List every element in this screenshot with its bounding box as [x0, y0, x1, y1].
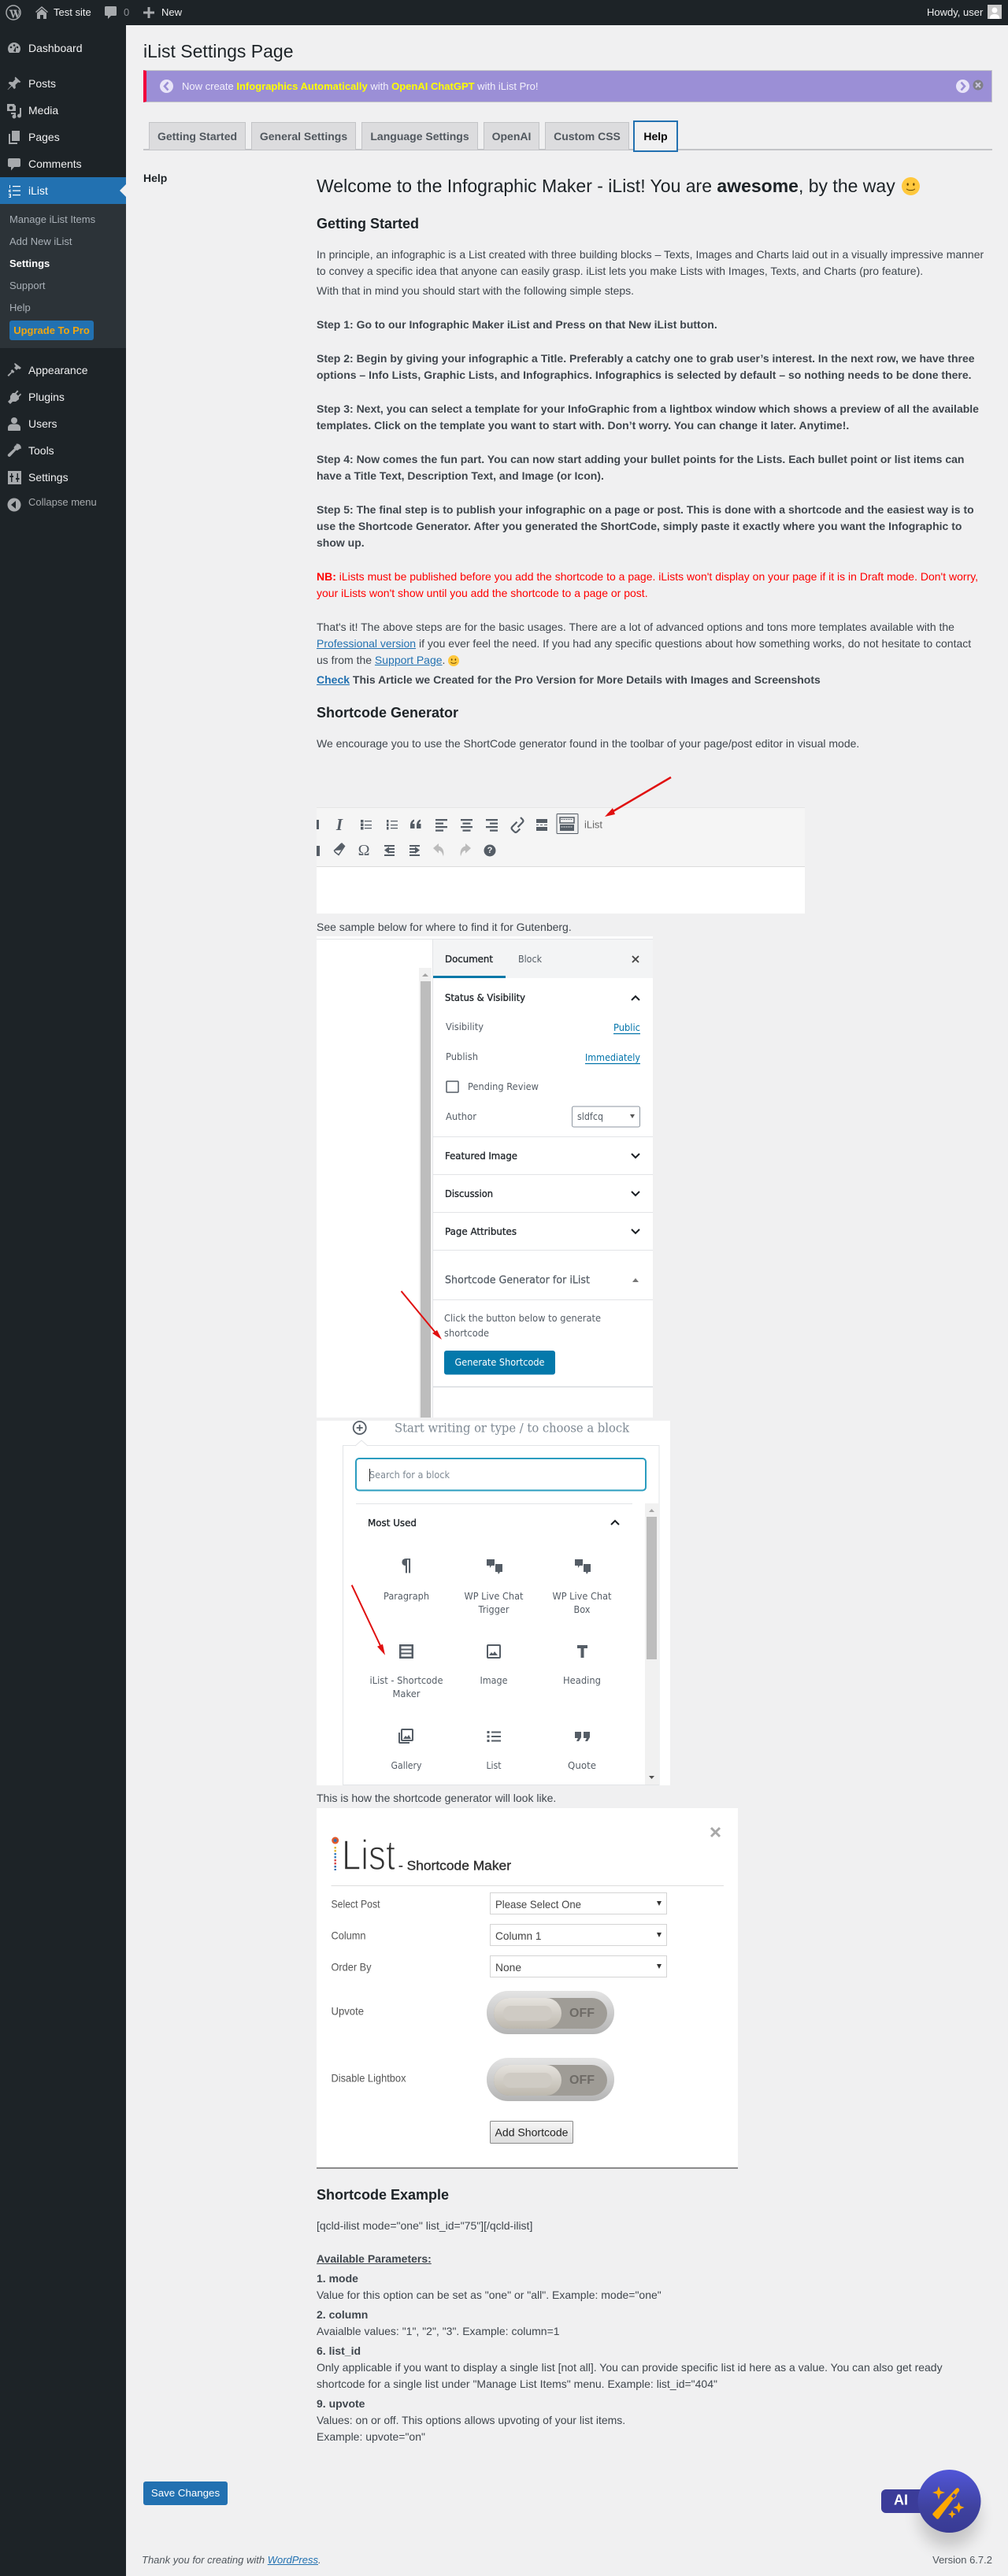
step 5: Step 5: The final step is to publish your infographic on a page or post. This is done with a shortcode and the easiest way is to: [317, 503, 974, 516]
row: order by: [331, 1956, 666, 1977]
warning note: [317, 570, 978, 599]
closing paragraph: That's it! The above steps are for the basic usages. There are a lot of advanced options and tons more templates available with the: [317, 621, 954, 633]
editor area: [317, 867, 805, 914]
parameter: list_id: Only applicable if you want to display a single list [not all]. You can provide specific list id here as a value. You can also get ready: [317, 2361, 943, 2374]
screenshot: block inserter: [317, 1421, 670, 1785]
iList toolbar label: iList: [584, 819, 602, 830]
icon: comments: [105, 6, 117, 19]
save changes button: [143, 2481, 228, 2505]
submenu link: Manage iList Items: Manage iList Items: [9, 213, 95, 225]
icon: WordPress logo: [6, 5, 21, 20]
menu item: Posts: Posts: [28, 77, 56, 90]
step 3: templates. Click on the template you want to start with. Don’t worry. You can change it later. Anytime!.: [317, 419, 849, 432]
menu item: Settings: Settings: [28, 471, 69, 484]
step 3: [317, 402, 979, 432]
parameter: mode: 1. mode: [317, 2272, 358, 2285]
greeting: Howdy, user: [927, 6, 983, 18]
panel: shortcode generator for iList: [433, 1274, 653, 1388]
intro paragraph: [317, 248, 984, 277]
row: column: Column: [331, 1929, 365, 1942]
screenshot background: [317, 1421, 670, 1785]
panel: status and visibility: [433, 992, 653, 1137]
arrow pointing at iList block: [352, 1585, 385, 1655]
inserter scrollbar: [645, 1503, 659, 1785]
screenshot: classic editor toolbar: ?: [487, 846, 493, 855]
parameter: upvote: [317, 2397, 625, 2443]
block: Heading: Heading: [563, 1675, 601, 1686]
icon: plus: [143, 7, 154, 18]
row: upvote toggle: Upvote: [331, 2005, 364, 2018]
menu item: Users: Users: [28, 417, 57, 430]
shortcode sample: [qcld-ilist mode="one" list_id="75"][/qcld-ilist]: [317, 2219, 532, 2232]
toolbar background: [317, 807, 805, 866]
inserter panel: [343, 1440, 659, 1785]
submenu link: Settings: Settings: [9, 258, 50, 269]
sidebar tabs: Block: [518, 954, 542, 965]
panel: status and visibility: Author: [446, 1111, 476, 1122]
closing paragraph: us from the Support Page.: [317, 654, 445, 666]
step 3: Step 3: Next, you can select a template for your InfoGraphic from a lightbox window which shows a preview of all the available: [317, 402, 979, 415]
step 5: show up.: [317, 536, 365, 549]
submenu button: Upgrade To Pro: [9, 321, 94, 340]
row: upvote toggle: OFF: [569, 2007, 595, 2020]
step 2: Step 2: Begin by giving your infographic a Title. Preferably a catchy one to grab user’s interest. In the next row, we have three: [317, 352, 975, 365]
block: Gallery: [391, 1729, 422, 1771]
caption: Gutenberg: See sample below for where to find it for Gutenberg.: [317, 921, 572, 933]
footer version: Version 6.7.2: [932, 2554, 992, 2566]
parameter: mode: Value for this option can be set as "one" or "all". Example: mode="one": [317, 2289, 662, 2301]
toolbar row two icons: [317, 842, 496, 859]
row: disable lightbox toggle: Disable Lightbox: [331, 2071, 406, 2084]
heading: Shortcode Generator: Shortcode Generator: [317, 705, 458, 721]
parameter: column: Avaialble values: "1", "2", "3". Example: column=1: [317, 2325, 560, 2337]
menu item: Comments: Comments: [28, 158, 82, 170]
block: WP Live Chat Box: WP Live Chat: [553, 1591, 612, 1602]
row: order by: Order By: [331, 1961, 372, 1974]
tab strip line: [143, 149, 992, 150]
row: column: [331, 1925, 666, 1945]
block: WP Live Chat Trigger: [465, 1559, 524, 1615]
block: Paragraph: ¶: [401, 1556, 412, 1577]
sidebar tabs: Document: [445, 954, 493, 965]
toolbar row one icons: I: [335, 815, 343, 834]
panel: status and visibility: Immediately: [585, 1052, 640, 1063]
tab: Language Settings: [361, 122, 478, 150]
save changes button: Save Changes: [151, 2487, 220, 2499]
menu item: Posts: [8, 77, 56, 90]
block: Image: Image: [480, 1675, 507, 1686]
toolbar row one icons: [317, 814, 578, 834]
panel: status and visibility: Pending Review: [468, 1081, 539, 1092]
icon: next arrow: [956, 80, 969, 93]
menu item: Settings: [8, 471, 69, 484]
closing paragraph: Professional version if you ever feel the need. If you had any specific questions about how something works, do not hesitate to contact: [317, 637, 971, 650]
step 2: options – Info Lists, Graphic Lists, and Infographics. Infographics is selected by default – so nothing needs to be done there.: [317, 369, 972, 381]
panel: collapsed sections: [433, 1151, 653, 1251]
block: Image: [480, 1645, 507, 1686]
icon: close: [973, 80, 983, 90]
intro sentence: With that in mind you should start with the following simple steps.: [317, 284, 634, 297]
notice text: Now create Infographics Automatically with OpenAI ChatGPT with iList Pro!: [182, 80, 538, 92]
welcome heading: Welcome to the Infographic Maker - iList! You are awesome, by the way: [317, 176, 895, 196]
menu item: Appearance: [8, 363, 88, 376]
AI assistant floating button: [881, 2470, 984, 2553]
step 4: have a Title Text, Description Text, and Image (or Icon).: [317, 469, 604, 482]
parameter: mode: [317, 2272, 662, 2301]
row: upvote toggle: [331, 1991, 614, 2034]
block: Paragraph: Paragraph: [384, 1591, 429, 1602]
step 5: [317, 503, 974, 549]
row: select post: Please Select One: [495, 1898, 581, 1911]
shadow: [919, 2487, 979, 2547]
menu item: Media: Media: [28, 104, 58, 117]
block: Paragraph: [384, 1556, 429, 1602]
block: List: List: [487, 1760, 502, 1771]
arrow pointing at generate text: [402, 1292, 442, 1340]
warning note: NB: iLists must be published before you add the shortcode to a page. iLists won't display on your page if it is in Draft mode. Don't worry,: [317, 570, 978, 583]
menu item: Appearance: Appearance: [28, 364, 88, 376]
parameters heading: Available Parameters:: [317, 2252, 432, 2265]
icon: previous arrow: [160, 80, 173, 93]
collapse menu: Collapse menu: [28, 496, 97, 508]
menu item: Plugins: [8, 391, 65, 404]
panel: status and visibility: Visibility: [446, 1021, 484, 1032]
iList submenu: [0, 204, 126, 348]
add block icon: [354, 1421, 366, 1434]
row: select post: Select Post: [331, 1898, 380, 1911]
tab: OpenAI: OpenAI: [492, 130, 531, 143]
avatar: [988, 5, 1002, 19]
screenshot background: [317, 936, 653, 1418]
panel: collapsed sections: Discussion: [445, 1188, 493, 1199]
icon: home: [35, 6, 48, 19]
sidebar tabs: [433, 940, 653, 978]
menu item: Users: [8, 417, 57, 431]
tab: Help (active): [633, 120, 678, 152]
panel: collapsed sections: Page Attributes: [445, 1226, 517, 1237]
toolbar row two icons: Ω: [358, 842, 369, 859]
tab: General Settings: [251, 122, 356, 150]
tab: OpenAI: [484, 122, 539, 150]
step 1: Step 1: Go to our Infographic Maker iList and Press on that New iList button.: [317, 318, 717, 331]
block: iList Shortcode Maker: iList - Shortcode: [370, 1675, 443, 1686]
parameter: list_id: 6. list_id: [317, 2344, 361, 2357]
placeholder heading: Start writing or type / to choose a block: [395, 1421, 629, 1435]
submenu link: Support: Support: [9, 280, 46, 291]
screenshot: classic editor toolbar: [317, 777, 805, 914]
inserter panel: Most Used: [368, 1518, 417, 1529]
new link: New: [161, 6, 182, 18]
page title: iList Settings Page: [143, 41, 294, 61]
footer credit: Thank you for creating with WordPress.: [142, 2554, 321, 2566]
warning note: your iLists won't show until you add the shortcode to a page or post.: [317, 587, 648, 599]
inserter panel: Search for a block: [369, 1470, 450, 1481]
logo: [332, 1832, 511, 1879]
panel: shortcode generator for iList: Click the button below to generate: [444, 1313, 601, 1324]
submenu link: Add New iList: Add New iList: [9, 235, 72, 247]
row: select post: [331, 1893, 666, 1914]
block: WP Live Chat Trigger: WP Live Chat: [465, 1591, 524, 1602]
heading: Getting Started: Getting Started: [317, 216, 419, 232]
menu item: Pages: [9, 131, 60, 144]
parameter: upvote: Values: on or off. This options allows upvoting of your list items.: [317, 2414, 625, 2426]
block: List: [487, 1731, 502, 1771]
heading: Shortcode Example: Shortcode Example: [317, 2187, 449, 2203]
intro paragraph: to convey a specific idea that anyone can easily grasp. iList lets you make Lists with Images, Texts, and Charts (pro feature).: [317, 265, 923, 277]
section label: Help: Help: [143, 172, 167, 184]
icon: smiley: [902, 177, 920, 195]
block: WP Live Chat Box: [553, 1559, 612, 1615]
row: disable lightbox toggle: OFF: [569, 2074, 595, 2087]
menu item: Dashboard: Dashboard: [28, 42, 82, 54]
step 4: [317, 453, 964, 482]
active menu pointer: [120, 184, 126, 197]
panel: shortcode generator for iList: Generate Shortcode: [455, 1357, 545, 1368]
logo: - Shortcode Maker: [398, 1859, 511, 1873]
block: WP Live Chat Trigger: Trigger: [478, 1604, 510, 1615]
icon: magic wand: [932, 2486, 964, 2519]
panel: collapsed sections: Featured Image: [445, 1151, 517, 1162]
step 2: [317, 352, 975, 381]
AI label pill: AI: [894, 2492, 908, 2507]
block: iList Shortcode Maker: Maker: [392, 1688, 421, 1699]
parameter: upvote: 9. upvote: [317, 2397, 365, 2410]
step 5: use the Shortcode Generator. After you generated the ShortCode, simply paste it exactly where you want the Infographic to: [317, 520, 962, 532]
panel: status and visibility: Publish: [446, 1051, 478, 1062]
menu item: iList (active): [0, 177, 126, 204]
screenshot: shortcode maker dialog: [317, 1808, 738, 2169]
intro paragraph: In principle, an infographic is a List created with three building blocks – Texts, Images and Charts laid out in a visually impressive manner: [317, 248, 984, 261]
block: Heading: [563, 1645, 601, 1686]
panel: shortcode generator for iList: Shortcode Generator for iList: [445, 1274, 590, 1287]
submenu link: Help: Help: [9, 302, 31, 313]
block grid items: [370, 1556, 612, 1771]
block: Gallery: Gallery: [391, 1760, 422, 1771]
panel: status and visibility: Public: [613, 1022, 640, 1033]
closing paragraph: [317, 621, 972, 666]
logo: List: [342, 1832, 395, 1879]
promo notice banner: [143, 70, 992, 102]
dialog background: [317, 1808, 738, 2168]
row: order by: None: [495, 1961, 521, 1974]
tab: Language Settings: Language Settings: [370, 130, 469, 143]
generator intro: We encourage you to use the ShortCode generator found in the toolbar of your page/post editor in visual mode.: [317, 737, 859, 750]
article link: Check This Article we Created for the Pro Version for More Details with Images and Screenshots: [317, 673, 821, 686]
block: Quote: Quote: [568, 1760, 596, 1771]
menu item: Media: [7, 104, 58, 118]
tab: Getting Started: Getting Started: [158, 130, 237, 143]
site name: Test site: [54, 6, 91, 18]
row: column: Column 1: [495, 1929, 542, 1942]
parameter: column: 2. column: [317, 2308, 368, 2321]
add shortcode button: [490, 2122, 573, 2144]
menu item: Pages: Pages: [28, 131, 60, 143]
parameter: list_id: [317, 2344, 943, 2390]
add shortcode button: Add Shortcode: [495, 2126, 569, 2139]
admin sidebar: [0, 0, 126, 2576]
caption: shortcode generator: This is how the shortcode generator will look like.: [317, 1792, 556, 1804]
admin top bar: [0, 0, 1008, 25]
scrollbar: [419, 968, 432, 1418]
menu item: iList (active): iList: [28, 184, 48, 197]
circle: [918, 2470, 981, 2533]
arrow pointing at iList button: [605, 777, 671, 817]
block: iList Shortcode Maker: [370, 1644, 443, 1699]
close icon: [711, 1828, 720, 1837]
submenu button: Upgrade To Pro: Upgrade To Pro: [13, 324, 90, 336]
menu item: Tools: [8, 444, 54, 457]
tab: General Settings: General Settings: [260, 130, 347, 143]
menu item: Plugins: Plugins: [28, 391, 65, 403]
parameter: column: [317, 2308, 560, 2337]
step 4: Step 4: Now comes the fun part. You can now start adding your bullet points for the Lists. Each bullet point or list items can: [317, 453, 964, 465]
comment count: 0: [124, 6, 129, 18]
panel: status and visibility: Status & Visibility: [445, 992, 525, 1003]
collapse menu: [8, 496, 97, 512]
tab: Custom CSS: Custom CSS: [554, 130, 621, 143]
panel: status and visibility: sldfcq: [577, 1111, 603, 1122]
parameter: upvote: Example: upvote="on": [317, 2430, 425, 2443]
screenshot: Gutenberg document sidebar: [317, 936, 653, 1418]
block: Quote: [568, 1732, 596, 1771]
row: disable lightbox toggle: [331, 2058, 614, 2101]
menu item: Tools: Tools: [28, 444, 54, 457]
tab: Custom CSS: [545, 122, 629, 150]
panel: shortcode generator for iList: shortcode: [444, 1328, 489, 1339]
tab: Help (active): Help: [643, 130, 668, 143]
tab: Getting Started: [149, 122, 246, 150]
block: WP Live Chat Box: Box: [573, 1604, 591, 1615]
parameter: list_id: shortcode for a single list under "Manage List Items" menu. Example: list_id="404": [317, 2378, 717, 2390]
